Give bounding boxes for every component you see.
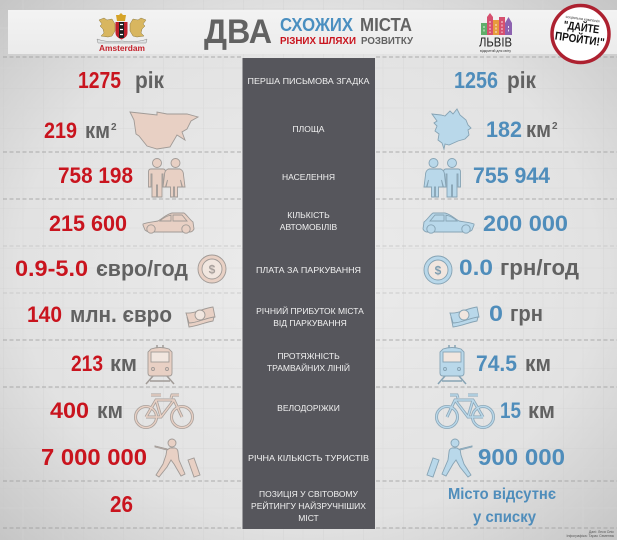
title: ДВА xyxy=(204,13,272,51)
label: area: ПЛОЩА xyxy=(293,124,325,134)
Amsterdam: tram lines xyxy=(71,351,137,376)
Lviv: tram lines: 74.5 xyxy=(476,351,517,376)
Amsterdam: tourists: 7 000 000 xyxy=(41,444,147,470)
Lviv: area xyxy=(486,117,558,142)
icon: Lviv tourist xyxy=(427,439,472,477)
Lviv: parking fee: 0.0 xyxy=(459,255,493,280)
label: tram lines: ТРАМВАЙНИХ ЛІНІЙ xyxy=(267,362,350,373)
Lviv: parking income: 0 xyxy=(489,301,503,326)
Amsterdam: tram lines: км xyxy=(110,351,137,376)
logo: Lviv: відкритий для світу xyxy=(480,49,511,53)
label: parking income: РІЧНИЙ ПРИБУТОК МІСТА xyxy=(256,305,364,316)
Lviv: area: 2 xyxy=(552,121,558,132)
label: ranking: ПОЗИЦІЯ У СВІТОВОМУ xyxy=(259,489,359,499)
icon: Amsterdam tourist xyxy=(155,439,200,477)
Lviv: ranking: Місто відсутнє xyxy=(448,486,556,503)
stamp: Дайте пройти xyxy=(552,6,609,62)
Amsterdam: parking income: млн. євро xyxy=(70,302,172,327)
header band xyxy=(8,10,617,54)
Lviv: bike paths: 15 xyxy=(500,398,521,423)
icon: Amsterdam coin: $ xyxy=(209,262,216,276)
Amsterdam: parking fee xyxy=(15,256,188,281)
icon: Lviv bicycle xyxy=(436,395,494,428)
credits: Інфографіка: Тарас Семенюк xyxy=(566,534,614,538)
icon: Lviv map xyxy=(432,109,471,149)
Amsterdam: parking fee: 0.9-5.0 xyxy=(15,256,88,281)
Lviv: parking fee xyxy=(459,255,579,280)
logo: Amsterdam: Amsterdam xyxy=(99,43,145,53)
Amsterdam: area: 219 xyxy=(44,118,77,143)
Amsterdam: bike paths: 400 xyxy=(50,398,89,423)
icon: Lviv car xyxy=(423,213,474,233)
icon: Amsterdam car xyxy=(143,213,194,233)
Amsterdam: ranking: 26 xyxy=(110,491,133,517)
icon: Amsterdam map xyxy=(130,112,198,149)
label: population: НАСЕЛЕННЯ xyxy=(282,172,335,182)
label: tourists: РІЧНА КІЛЬКІСТЬ ТУРИСТІВ xyxy=(248,453,369,463)
Lviv: bike paths xyxy=(500,398,555,423)
title xyxy=(204,13,413,51)
stamp: Дайте пройти: "ДАЙТЕ xyxy=(563,19,600,37)
Lviv: founding year: 1256 xyxy=(454,67,498,93)
logo: Lviv: ЛЬВІВ xyxy=(479,36,512,50)
Amsterdam: cars: 215 600 xyxy=(49,211,127,236)
title: МІСТА xyxy=(360,15,412,35)
Amsterdam: founding year: 1275 xyxy=(78,67,121,93)
Lviv: ranking: у списку xyxy=(473,509,536,526)
Amsterdam: parking income xyxy=(27,302,172,327)
Lviv: parking income: грн xyxy=(510,301,543,326)
label: tram lines: ПРОТЯЖНІСТЬ xyxy=(277,351,340,361)
Lviv: cars: 200 000 xyxy=(483,211,568,236)
label: parking income: ВІД ПАРКУВАННЯ xyxy=(273,318,347,328)
title: СХОЖИХ xyxy=(280,15,353,35)
icon: Lviv people xyxy=(424,158,460,197)
icon: Lviv coin: $ xyxy=(435,264,442,278)
icon: Lviv banknotes xyxy=(450,307,479,327)
Lviv: founding year xyxy=(454,67,536,93)
stamp: Дайте пройти: ПРОЙТИ!" xyxy=(554,30,605,49)
label: ranking: МІСТ xyxy=(298,513,319,523)
icon: Amsterdam tram xyxy=(146,345,174,384)
Amsterdam: area xyxy=(44,118,117,143)
label: cars: КІЛЬКІСТЬ xyxy=(287,210,330,220)
Lviv: tram lines: км xyxy=(525,351,551,376)
Amsterdam: tram lines: 213 xyxy=(71,351,103,376)
Lviv: area: 182 xyxy=(486,117,522,142)
Lviv: population: 755 944 xyxy=(473,163,551,188)
icon: Amsterdam banknotes xyxy=(186,307,215,327)
label: parking fee: ПЛАТА ЗА ПАРКУВАННЯ xyxy=(256,265,361,275)
panel: central labels xyxy=(242,58,375,529)
icon: Amsterdam people xyxy=(148,158,185,197)
title: РІЗНИХ ШЛЯХИ xyxy=(280,35,356,47)
Amsterdam: bike paths xyxy=(50,398,123,423)
icon: Lviv coin xyxy=(424,256,452,284)
label: ranking: РЕЙТИНГУ НАЙЗРУЧНІШИХ xyxy=(251,500,366,511)
logo: Lviv xyxy=(479,13,512,53)
Lviv: parking income xyxy=(489,301,543,326)
label: bike paths: ВЕЛОДОРІЖКИ xyxy=(277,403,340,413)
icon: Amsterdam coin xyxy=(198,255,226,283)
Lviv: founding year: рік xyxy=(507,67,536,93)
Lviv: tourists: 900 000 xyxy=(478,444,565,470)
label: cars: АВТОМОБІЛІВ xyxy=(280,222,338,232)
Lviv: parking fee: грн/год xyxy=(500,255,579,280)
Amsterdam: population: 758 198 xyxy=(58,163,133,188)
Amsterdam: bike paths: км xyxy=(97,398,123,423)
Lviv: ranking xyxy=(448,486,556,526)
Amsterdam: parking fee: євро/год xyxy=(96,256,188,281)
icon: Amsterdam bicycle xyxy=(136,395,192,428)
credits xyxy=(566,530,614,538)
credits: Дані: Леся Оліс xyxy=(589,530,614,534)
Amsterdam: founding year xyxy=(78,67,164,93)
logo: Amsterdam xyxy=(97,13,147,53)
Amsterdam: area: км xyxy=(85,118,110,143)
title: РОЗВИТКУ xyxy=(361,35,413,47)
icon: Lviv tram xyxy=(438,345,466,384)
Amsterdam: parking income: 140 xyxy=(27,302,62,327)
Lviv: bike paths: км xyxy=(528,398,555,423)
stamp: Дайте пройти: соціальна кампанія xyxy=(565,15,600,24)
Amsterdam: founding year: рік xyxy=(135,67,164,93)
Amsterdam: area: 2 xyxy=(111,122,117,133)
Lviv: tram lines xyxy=(476,351,551,376)
Lviv: area: км xyxy=(526,117,551,142)
label: first mention: ПЕРША ПИСЬМОВА ЗГАДКА xyxy=(248,76,370,86)
